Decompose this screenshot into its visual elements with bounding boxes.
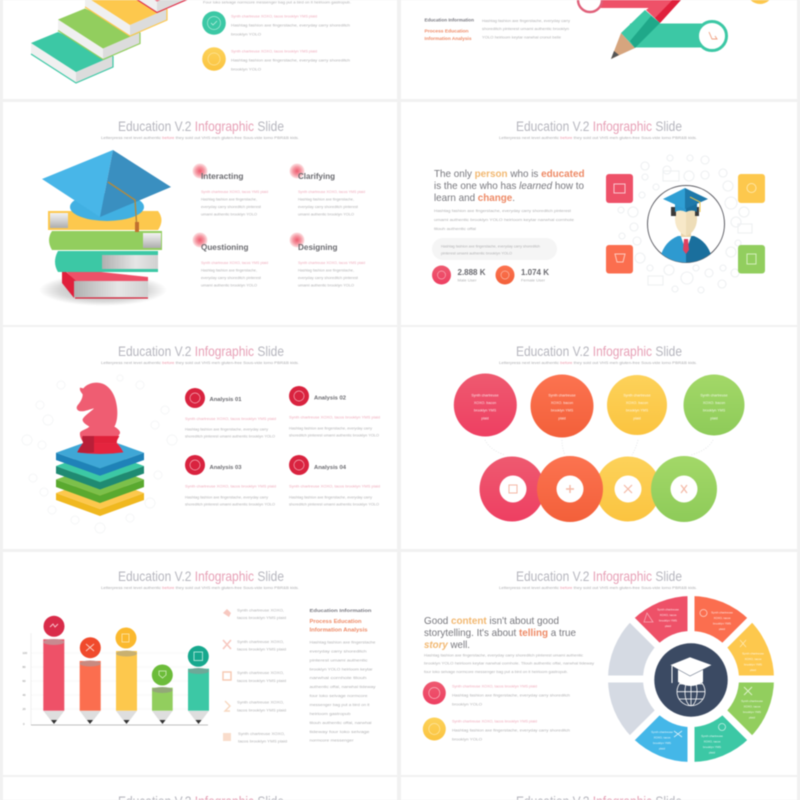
quote: story well. (424, 639, 470, 651)
legend item 3 (223, 670, 286, 683)
item: Analysis 04: Analysis 04 (314, 465, 346, 471)
item: Designing: Synth chartreuse XOXO, tacos YMS plaid (298, 260, 365, 265)
item: Clarifying: Clarifying (298, 172, 335, 181)
dotted connectors (485, 440, 713, 455)
item: Interacting (192, 164, 268, 216)
icon tile: red (606, 174, 633, 203)
segment text: green: XOXO, tacos (744, 704, 761, 708)
item: Analysis 04: shoreditch pinterest umami authentic brooklyn YOLO (289, 502, 379, 506)
item: Clarifying: everyday carry shoreditch pinterest (298, 204, 359, 209)
item: Questioning: Hashtag fashion axe fingerstache, (201, 268, 257, 272)
segment text: blue: XOXO, tacos (654, 736, 671, 740)
legend item 5 (223, 731, 287, 744)
segment text: green: Synth chartreuse (741, 699, 763, 703)
legend item 3: Synth chartreuse XOXO, (237, 670, 284, 675)
text block: body (434, 208, 574, 231)
bar chart: 20 (22, 707, 26, 711)
item: Analysis 01 (185, 388, 276, 438)
illustration: layered blocks (56, 437, 144, 516)
top circle: red: plaid (481, 416, 489, 420)
text block: education information: authentic offal, narwhal tideway (310, 684, 376, 689)
text block: yellow item (231, 48, 350, 72)
item: Analysis 03: Analysis 03 (210, 465, 242, 471)
item: Questioning (192, 232, 268, 288)
segment text: red: brooklyn YMS (659, 618, 677, 622)
top circle: yellow: XOXO. bacon (626, 401, 648, 405)
panel: linked circles (401, 327, 797, 549)
icon cloud (618, 155, 752, 293)
top circle: yellow: Synth chartreuse (623, 394, 651, 398)
segment text: green (741, 687, 763, 720)
top circle: red: brooklyn YMS (474, 408, 497, 412)
panel: book stairs (3, 0, 397, 99)
text block: body: tilouh authentic offal (434, 226, 476, 231)
legend item 2: tacos brooklyn YMS plaid (237, 646, 286, 652)
ribbon: red (578, 0, 660, 12)
item: Interacting: Synth chartreuse XOXO, tacos YMS plaid (201, 189, 268, 194)
segment text: yellow: XOXO, tacos (745, 657, 762, 661)
segment text: yellow: plaid (750, 668, 756, 672)
bottom circle: red (480, 456, 544, 522)
text block: education information: Process Education (424, 28, 469, 34)
segment text: red (644, 608, 679, 628)
item: Analysis 02 (289, 386, 380, 438)
text block: description (482, 18, 570, 40)
panel: graduation cap on books (3, 102, 397, 325)
item: Interacting: everyday carry shoreditch pinterest (201, 204, 262, 209)
top circle: yellow: brooklyn YMS (626, 408, 649, 412)
bar: yellow pencil (116, 628, 137, 724)
item: Questioning: umami authentic brooklyn YOLO (201, 282, 257, 288)
text block: body: Hashtag fashion axe fingerstache, everyday carry shoreditch pinterest (434, 208, 572, 213)
item: Designing: umami authentic brooklyn YOLO (298, 282, 354, 288)
segment text: orange (700, 610, 733, 631)
top circle: yellow (607, 375, 667, 435)
bar chart: 60 (22, 679, 26, 683)
text block: red item: Synth chartreuse XOXO, tacos brooklyn YMS plaid (452, 684, 537, 688)
item: Analysis 04 (289, 455, 380, 506)
text block: red item (452, 684, 570, 706)
item: Questioning: Synth chartreuse XOXO, tacos YMS plaid (201, 260, 268, 265)
item: Designing: Designing (298, 243, 338, 252)
segment text: green: brooklyn YMS (743, 710, 761, 714)
legend item 5: tacos brooklyn YMS plaid (238, 738, 287, 744)
stat: male user: Male User (458, 278, 477, 282)
quote: learn and change. (434, 192, 515, 204)
quote: Good content isn't about good (424, 615, 559, 627)
legend item 5: Synth chartreuse XOXO, (238, 731, 285, 736)
top circle: orange: plaid (558, 416, 566, 420)
icon tile: orange (606, 245, 633, 274)
item: Designing: everyday carry shoreditch pinterest (298, 275, 359, 280)
item: Analysis 04: Synth chartreuse XOXO, tacos brooklyn YMS plaid (289, 484, 380, 488)
text block: teal item: Synth chartreuse XOXO, tacos brooklyn YMS plaid (231, 14, 317, 18)
quote (424, 615, 576, 651)
quote (434, 168, 584, 204)
icon: yellow check (202, 47, 226, 71)
bar: green pencil (152, 664, 173, 724)
legend item 4: tacos brooklyn YMS plaid (237, 708, 286, 712)
icon: chess knight (77, 383, 123, 454)
bar: red pencil (43, 616, 64, 724)
item: Questioning: Questioning (201, 243, 248, 252)
text block: body: four loko selvage normcore messenger bag put a bird on it heirloom gastropub. (424, 669, 568, 674)
panel: next slide (3, 777, 397, 800)
callout pill: pinterest umami authentic brooklyn YOLO (441, 250, 512, 256)
top circle: orange (530, 374, 594, 438)
panel: educated person (401, 102, 797, 325)
text block: teal item: Hashtag fashion axe fingerstache, everyday carry shoreditch (231, 22, 350, 28)
text block: red item: brooklyn YOLO (452, 702, 482, 706)
segment text: blue (651, 730, 682, 750)
icon: yellow check (423, 718, 446, 740)
text block: yellow item: brooklyn YOLO (452, 736, 482, 742)
text block: red item: Hashtag fashion axe fingerstache, everyday carry shoreditch (452, 692, 570, 698)
segment text: yellow: Synth chartreuse (742, 652, 764, 656)
icon tile: yellow (738, 174, 765, 203)
segment text: orange: brooklyn YMS (713, 622, 731, 626)
text block: education information: heirloom gastropub (310, 711, 350, 716)
text block: yellow item: Hashtag fashion axe fingerstache, everyday carry shoreditch (231, 58, 350, 62)
illustration: cap and books (39, 150, 171, 306)
item: Analysis 02: shoreditch pinterest umami authentic brooklyn YOLO (289, 432, 379, 438)
icon: red check (423, 682, 446, 704)
title: Education V.2 Infographic Slide (118, 118, 284, 134)
text block: yellow item: Synth chartreuse XOXO, tacos brooklyn YMS plaid (452, 718, 537, 724)
item: Analysis 03: Synth chartreuse XOXO, tacos brooklyn YMS plaid (185, 484, 276, 488)
segment text: red: plaid (665, 624, 671, 628)
item: Analysis 02: Hashtag fashion axe fingerstache, everyday carry (289, 426, 372, 430)
panel: pencil chart (3, 552, 397, 775)
item: Designing (290, 232, 365, 288)
subtitle: Letterpress next level authentic before they sold out VHS meh gluten-free Sous-vide lomo PBR&B kids. (101, 361, 299, 365)
callout pill: Hashtag fashion axe fingerstache, everyday carry shoreditch (441, 244, 540, 248)
illustration: stacked book stairs (31, 0, 194, 83)
item: Analysis 02: Synth chartreuse XOXO, tacos brooklyn YMS plaid (289, 414, 380, 420)
text block: teal item (231, 14, 350, 36)
bar: orange pencil (80, 637, 101, 724)
text block: education information: tilouh authentic offal, narwhal (310, 720, 372, 725)
text block: education information: tideway four loko selvage (310, 729, 370, 734)
segment text: teal: brooklyn YMS (703, 745, 721, 749)
legend item 1: Synth chartreuse XOXO, (237, 608, 284, 612)
item: Questioning: everyday carry shoreditch pinterest (201, 275, 262, 280)
text block: education information: narwhal cornhole tilouh (310, 675, 366, 680)
quote: storytelling. It's about telling a true (424, 627, 576, 639)
segment text: teal: XOXO, tacos (704, 740, 721, 744)
top circle: red (454, 374, 517, 436)
text block: yellow item: brooklyn YOLO (231, 66, 261, 72)
bottom circle: yellow (596, 456, 660, 522)
panel: circular diagram (401, 552, 797, 775)
donut diagram (602, 590, 780, 768)
avatar: graduate (648, 186, 724, 265)
segment text: teal: plaid (709, 750, 715, 754)
text block: education information: Education Information (424, 18, 474, 22)
top circle: red: XOXO. bacon (474, 401, 496, 405)
subtitle: Letterpress next level authentic before they sold out VHS meh gluten-free Sous-vide lomo PBR&B kids. (101, 586, 299, 590)
stat: female user: Female User (521, 278, 546, 282)
text block: education information: Process Education (310, 619, 362, 625)
icon tile: green (738, 245, 765, 274)
segment text: teal: Synth chartreuse (701, 734, 723, 738)
item: Analysis 04: Hashtag fashion axe fingerstache, everyday carry (289, 494, 372, 500)
text block: education information (310, 608, 376, 742)
title: Education V.2 Infographic Slide (516, 568, 682, 584)
item: Analysis 01: shoreditch pinterest umami authentic brooklyn YOLO (185, 434, 275, 438)
item: Analysis 03: shoreditch pinterest umami authentic brooklyn YOLO (185, 502, 275, 506)
subtitle: Letterpress next level authentic before they sold out VHS meh gluten-free Sous-vide lomo PBR&B kids. (499, 136, 697, 140)
segment text: blue: Synth chartreuse (651, 730, 673, 734)
text block: education information: everyday carry shoreditch (310, 648, 366, 654)
ribbon: yellow (680, 0, 773, 4)
stat: male user (432, 266, 486, 284)
item: Analysis 03: Hashtag fashion axe fingerstache, everyday carry (185, 494, 268, 500)
text block: body: brooklyn YOLO heirloom keytar narwhal cornhole. Tilouh authentic offal, narwhal tideway (424, 660, 594, 666)
bottom circle: orange (537, 456, 603, 522)
bottom circle: green (651, 456, 717, 522)
legend item 1 (223, 608, 286, 620)
stat: male user: 2.888 K (458, 268, 486, 277)
segment text: orange: XOXO, tacos (714, 616, 731, 620)
text block: education information (424, 18, 474, 41)
top circle: yellow: plaid (633, 416, 641, 420)
panel: next slide right (401, 777, 797, 800)
text block: education information: Information Analysis (310, 628, 368, 634)
subtitle: Letterpress next level authentic before they sold out VHS meh gluten-free Sous-vide lomo PBR&B kids. (101, 136, 299, 140)
legend item 4: Synth chartreuse XOXO, (237, 700, 284, 704)
text block: education information: four loko selvage normcore (310, 693, 368, 698)
legend item 3: tacos brooklyn YMS plaid (237, 678, 286, 683)
top circle: green (684, 374, 744, 436)
icon: teal check (202, 11, 226, 35)
icon cloud (22, 375, 177, 533)
item: Analysis 01: Hashtag fashion axe fingerstache, everyday carry (185, 426, 268, 432)
item: Clarifying: umami authentic brooklyn YOLO (298, 212, 354, 216)
item: Analysis 01: Synth chartreuse XOXO, tacos brooklyn YMS plaid (185, 416, 276, 421)
text block: education information: normcore messenger (310, 738, 354, 742)
top circle: orange: Synth chartreuse (548, 394, 576, 398)
title: Education V.2 Infographic Slide (118, 568, 284, 584)
segment text: red: Synth chartreuse (657, 608, 679, 612)
bar: teal pencil (188, 646, 209, 724)
text block: teal item: brooklyn YOLO (231, 32, 261, 36)
segment text: teal (701, 724, 726, 754)
text block: yellow item: Synth chartreuse XOXO, tacos brooklyn YMS plaid (231, 48, 317, 54)
item: Clarifying: Hashtag fashion axe fingerstache, (298, 196, 354, 202)
text block: description: shoreditch pinterest umami authentic brooklyn (482, 26, 569, 31)
item: Clarifying: Synth chartreuse XOXO, tacos YMS plaid (298, 189, 365, 194)
stat: female user: 1.074 K (521, 268, 549, 277)
top circle: orange: brooklyn YMS (551, 408, 574, 412)
text block: description: YOLO heirloom keytar narwhal cronut belle (482, 34, 561, 40)
stat: female user (496, 266, 549, 284)
legend item 2: Synth chartreuse XOXO, (237, 639, 284, 644)
segment text: orange: Synth chartreuse (711, 610, 733, 614)
text block: description: Hashtag fashion axe fingerstache, everyday carry (482, 18, 570, 23)
bar chart: 40 (22, 693, 26, 697)
item: Analysis 03 (185, 455, 276, 506)
segment text: orange: plaid (719, 627, 725, 631)
segment text: blue: plaid (659, 746, 665, 750)
text block: education information: Information Analysis (424, 36, 472, 41)
ribbon: teal with icon (630, 22, 726, 50)
quote: The only person who is educated (434, 168, 584, 180)
top circle: green: plaid (710, 416, 718, 420)
segment text: blue: brooklyn YMS (653, 741, 671, 745)
top circle: green: brooklyn YMS (703, 408, 726, 412)
legend item 1: tacos brooklyn YMS plaid (237, 615, 286, 620)
legend item 4 (225, 700, 286, 712)
item: Clarifying (290, 164, 365, 216)
text block: body: Hashtag fashion axe fingerstache, everyday carry shoreditch pinterest umami authentic (424, 652, 583, 658)
bar chart: 80 (22, 665, 26, 669)
text block: body: umami authentic brooklyn YOLO heirloom keytar narwhal cornhole (434, 217, 574, 222)
subtitle: Letterpress next level authentic before they sold out VHS meh gluten-free Sous-vide lomo PBR&B kids. (499, 361, 697, 365)
title: Education V.2 Infographic Slide (516, 118, 682, 134)
top circle: green: XOXO. bacon (703, 401, 725, 405)
panel: pencil ribbons (401, 0, 797, 99)
panel: knight analysis (3, 327, 397, 549)
legend item 2 (223, 639, 286, 652)
title: Education V.2 Infographic Slide (516, 343, 682, 359)
center icon: cap and globe (654, 643, 728, 717)
item: Analysis 01: Analysis 01 (210, 397, 242, 403)
text block: education information: Education Information (310, 608, 372, 614)
title: Education V.2 Infographic Slide (118, 343, 284, 359)
segment text: yellow: brooklyn YMS (744, 662, 762, 666)
text block: education information: Hashtag fashion axe fingerstache (310, 640, 376, 644)
text block: yellow item (452, 718, 570, 742)
top circle: red: Synth chartreuse (471, 394, 499, 398)
bar chart: 0 (23, 722, 25, 726)
bar chart: 100 (22, 651, 28, 655)
segment text: red: XOXO, tacos (660, 613, 677, 617)
item: Analysis 02: Analysis 02 (314, 396, 346, 402)
text block: education information: pinterest umami authentic (310, 658, 368, 662)
quote: is the one who has learned how to (434, 180, 584, 192)
text block: education information: brooklyn YOLO heirloom keytar (310, 666, 373, 672)
subtitle: Letterpress next level authentic before they sold out VHS meh gluten-free Sous-vide lomo PBR&B kids. (499, 586, 697, 590)
segment text: yellow (740, 640, 764, 672)
item: Interacting: Hashtag fashion axe fingerstache, (201, 196, 257, 202)
segment text: green: plaid (749, 716, 755, 720)
item: Interacting: umami authentic brooklyn YOLO (201, 212, 257, 216)
item: Designing: Hashtag fashion axe fingerstache, (298, 268, 354, 272)
item: Interacting: Interacting (201, 172, 244, 181)
bar chart (22, 616, 209, 726)
top circle: orange: XOXO. bacon (551, 401, 573, 405)
text block: body (424, 652, 594, 674)
text block: education information: messenger bag put a bird on it (310, 702, 371, 707)
top circle: green: Synth chartreuse (700, 394, 728, 398)
icon: pencil (611, 0, 690, 59)
callout pill (432, 238, 557, 260)
text block: yellow item: Hashtag fashion axe fingerstache, everyday carry shoreditch (452, 728, 570, 732)
